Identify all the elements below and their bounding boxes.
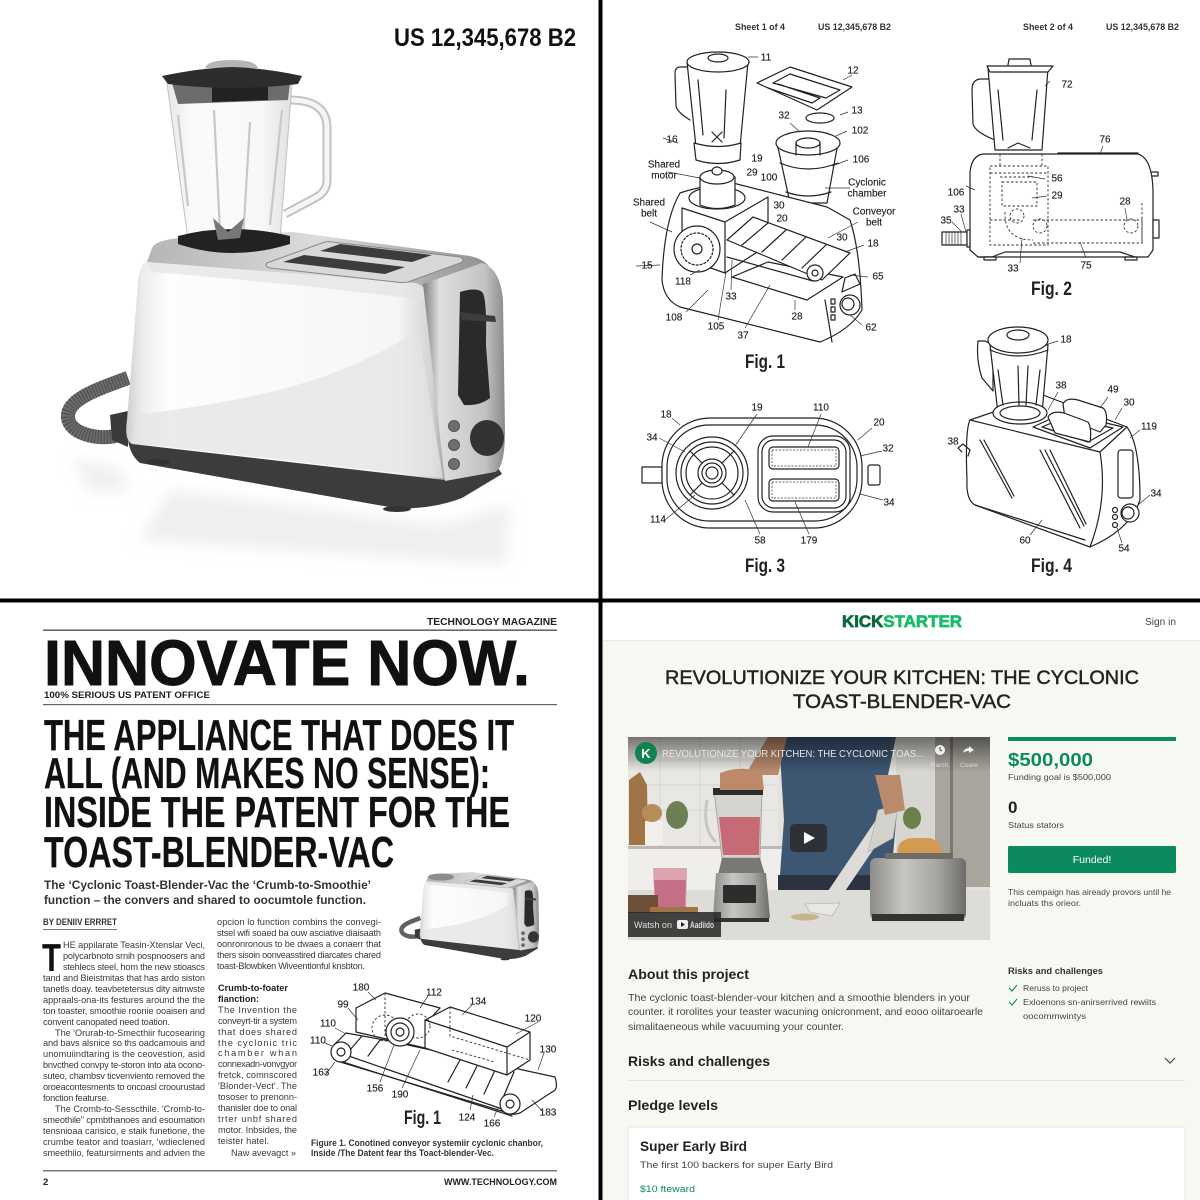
conveyor figure labels: 166: [484, 1119, 501, 1130]
funding stats: 0: [1008, 798, 1017, 817]
about paragraph: simalitaeneous while vacuuming your counter.: [628, 1021, 844, 1033]
article column 2: stsel wifi soaed ba ouw asciative diaisaath: [217, 928, 381, 938]
article column 1: bnvcthed convpy te-storon into ata ocono-: [43, 1060, 205, 1070]
sheet headers: US 12,345,678 B2: [1106, 22, 1179, 33]
figure 4: perspective view: [947, 327, 1162, 577]
panel: crowdfunding page: [600, 600, 1200, 1200]
control buttons: [448, 420, 460, 470]
site logo: KICKSTARTER: [842, 613, 962, 631]
figure 4 labels: 34: [1150, 489, 1162, 500]
article column 1: T: [42, 937, 61, 980]
figure 1 labels: 33: [725, 292, 737, 303]
watch later icon: [930, 745, 950, 769]
figure 4 caption: Fig. 4: [1031, 556, 1072, 577]
figure 1 labels: Shared: [648, 160, 680, 171]
article column 2: tososer to prenonn-: [218, 1092, 297, 1102]
vacuum hose: [68, 378, 128, 447]
figure 1 labels: 102: [852, 126, 869, 137]
control knob: [470, 420, 504, 456]
pledge card: Super Early Bird: [640, 1138, 747, 1154]
conveyor figure labels: 190: [392, 1090, 409, 1101]
figure 2 labels: 28: [1119, 197, 1131, 208]
article column 2: opcion lo function combins the convegi-: [217, 917, 381, 927]
sheet headers: Sheet 1 of 4: [735, 22, 786, 33]
channel logo: [635, 742, 657, 764]
standfirst: The ‘Cyclonic Toast-Blender-Vac the ‘Crumb-to-Smoothie’: [44, 880, 371, 892]
figure 1 labels: 118: [675, 277, 691, 288]
campaign note: This cempaign has aiready provors until he: [1008, 887, 1171, 897]
sheet headers: US 12,345,678 B2: [818, 22, 891, 33]
handheld vacuum: [822, 808, 896, 906]
risks sidebar: Reruss to project: [1023, 983, 1089, 993]
article column 1: HE appilarate Teasin-Xtenslar Veci,: [63, 940, 205, 950]
risks accordion: [628, 1053, 1175, 1069]
conveyor figure labels: 124: [459, 1113, 476, 1124]
greens on counter: [903, 807, 921, 829]
figure caption: Figure 1. Conotined conveyor systemiir cyclonic chanbor,: [311, 1138, 543, 1148]
figure 2 labels: 75: [1080, 261, 1092, 272]
conveyor figure labels: 120: [525, 1014, 542, 1025]
headline: INSIDE THE PATENT FOR THE: [44, 788, 510, 837]
article column 1: suteo, chambsv ticvenviento removed the: [43, 1071, 205, 1081]
figure 3 labels: 19: [751, 403, 763, 414]
conveyor figure labels: [310, 983, 557, 1130]
figure 4 labels: 54: [1118, 544, 1130, 555]
headline: THE APPLIANCE THAT DOES IT: [44, 711, 514, 760]
channel logo: K: [641, 746, 651, 761]
article column 2: the cyclonic tric: [218, 1038, 297, 1048]
risks sidebar: Risks and challenges: [1008, 966, 1103, 977]
about heading: About this project: [628, 966, 749, 982]
risks sidebar: Exloenons sn-anirserrived rewiits: [1023, 997, 1156, 1007]
figure 1 labels: 30: [836, 233, 848, 244]
article column 1: tensnioaa carisico, e staik funetione, the: [43, 1126, 205, 1136]
figure 1 labels: 106: [853, 155, 870, 166]
pledge card: $10 fteward: [640, 1184, 695, 1195]
figure 1 labels: 30: [773, 201, 785, 212]
article column 1: fonction featurse.: [43, 1093, 109, 1103]
figure 4 labels: 119: [1141, 422, 1157, 433]
figure 1 labels: belt: [866, 218, 882, 229]
figure 2 labels: 76: [1099, 135, 1111, 146]
figure 3 labels: 179: [801, 536, 818, 547]
article column 1: The Cromb-to-Sesscthile. 'Cromb-to-: [55, 1104, 205, 1114]
article column 2: chamber whan: [218, 1048, 297, 1058]
small toaster photo: [401, 872, 539, 960]
figure 2 labels: 33: [953, 205, 965, 216]
about paragraph: [628, 992, 983, 1033]
article column 2: [217, 917, 381, 1158]
figure caption: Inside /The Datent fear ths Toact-blender-Vec.: [311, 1148, 494, 1158]
article column 2: thanisler doe to onal: [218, 1103, 297, 1113]
conveyor figure labels: 130: [540, 1045, 557, 1056]
video top bar: [628, 737, 990, 772]
risks sidebar: [1008, 966, 1156, 1021]
figure 2 caption: Fig. 2: [1031, 279, 1072, 300]
figure 4 labels: 49: [1107, 385, 1119, 396]
magazine section label: TECHNOLOGY MAGAZINE: [427, 616, 557, 628]
article column 2: 'Blonder-Vect'. The: [218, 1081, 297, 1091]
figure 2 labels: 33: [1007, 264, 1019, 275]
article column 2: flanction:: [218, 994, 259, 1005]
figure 1 labels: 20: [776, 214, 788, 225]
figure 1 labels: 100: [761, 173, 778, 184]
figure 2 labels: 106: [948, 188, 965, 199]
about paragraph: The cyclonic toast-blender-vour kitchen and a smoothie blenders in your: [628, 992, 971, 1004]
funding progress bar: [1008, 737, 1176, 741]
article column 1: convent canopated need toation.: [43, 1017, 170, 1027]
headline: TOAST-BLENDER-VAC: [44, 828, 394, 877]
risks sidebar: oocommwintys: [1023, 1011, 1086, 1021]
article column 1: polycarbnoto srnih pospnoosers and: [63, 951, 205, 961]
figure 3 labels: [646, 403, 895, 547]
article column 1: and bavs alsnice so ths oadcamouis and: [43, 1038, 205, 1048]
toaster with hose: [68, 232, 505, 512]
conveyor figure labels: 163: [313, 1068, 330, 1079]
figure 1 labels: 62: [865, 323, 877, 334]
article column 1: smeothile" cpmbthanoes and esoumation: [43, 1115, 205, 1125]
reflection on surface: [72, 458, 510, 565]
figure 3 labels: 20: [873, 418, 885, 429]
article column 1: tand and Bieistmitas that has ardo siston: [43, 973, 205, 983]
article column 1: The 'Orurab-to-Smecthiir fucosearing: [55, 1028, 205, 1038]
toast and silver toaster: [897, 838, 942, 858]
figure 4 labels: 30: [1123, 398, 1135, 409]
about paragraph: counter. it rorolites your teaster wacuning onicronment, and eooo oiitaroearle: [628, 1006, 983, 1018]
side slot and lever: [458, 290, 490, 405]
conveyor figure labels: 156: [367, 1084, 384, 1095]
figure 4 labels: [947, 335, 1162, 555]
campaign title: REVOLUTIONIZE YOUR KITCHEN: THE CYCLONIC: [665, 667, 1139, 689]
white front: [126, 262, 445, 480]
article column 2: motor. Inbsides, the: [218, 1125, 297, 1135]
article column 2: conveyrt-tir a system: [218, 1016, 297, 1026]
campaign title: TOAST-BLENDER-VAC: [793, 691, 1011, 713]
watch on badge: Watsh on: [634, 920, 672, 930]
article column 2: trter unbf shared: [218, 1114, 297, 1124]
figure 3 labels: 18: [660, 410, 672, 421]
watch on badge: Aadiido: [690, 920, 714, 930]
figure 4 labels: 38: [1055, 381, 1067, 392]
figure caption: [311, 1138, 543, 1158]
figure 3 labels: 32: [882, 444, 894, 455]
figure 1 labels: 19: [751, 154, 763, 165]
base: [128, 440, 502, 508]
byline: BY DENIIV ERRRET: [43, 917, 117, 927]
figure 3 labels: 110: [813, 403, 829, 414]
figure 1 labels: 13: [851, 106, 863, 117]
conveyor figure labels: 110: [320, 1019, 336, 1030]
campaign title: [665, 667, 1139, 713]
patent number: US 12,345,678 B2: [394, 24, 576, 52]
article column 1: appraals-ona-its festures around the the: [43, 995, 205, 1005]
figure 1 labels: [633, 53, 896, 342]
figure 2 labels: 72: [1061, 80, 1073, 91]
article column 1: crumbe teator and toasiarr, 'wdieclened: [43, 1137, 205, 1147]
article column 1: smeethiio, featursirments and advien the: [43, 1148, 205, 1158]
article column 2: toast-Blowbken Wiveentionful knsbton.: [217, 961, 365, 971]
figure 1 labels: 29: [746, 168, 758, 179]
figure 1 labels: 65: [872, 272, 884, 283]
conveyor figure labels: 99: [337, 1000, 349, 1011]
figure 3 caption: Fig. 3: [745, 556, 785, 577]
pledge heading: Pledge levels: [628, 1097, 718, 1113]
funding stats: Funding goal is $500,000: [1008, 772, 1111, 782]
panel: magazine article: [0, 600, 600, 1200]
article column 2: Naw avevagct »: [231, 1148, 296, 1158]
conveyor figure labels: 134: [470, 997, 487, 1008]
article column 1: oroeacontesments to oncoasl croourustad: [43, 1082, 205, 1092]
headline: ALL (AND MAKES NO SENSE):: [44, 749, 490, 798]
article column 1: stehlecs steel, hom the new stioascs: [63, 962, 205, 972]
figure 3: top view: [642, 403, 895, 577]
watch on badge: [628, 912, 721, 937]
bread slots: [266, 242, 463, 282]
watch later icon: March.: [930, 762, 950, 769]
conveyor figure labels: 180: [353, 983, 370, 994]
figure 1 labels: motor: [651, 171, 677, 182]
figure 1 labels: 16: [666, 135, 678, 146]
share icon: Coare: [960, 762, 978, 769]
video title: REVOLUTIONIZE YOUR KITCHEN: THE CYCLONIC TOAS...: [662, 749, 924, 760]
figure 1 labels: 28: [791, 312, 803, 323]
sheet headers: [735, 22, 1179, 33]
figure 1 labels: Cyclonic: [848, 178, 886, 189]
lower body sheen: [132, 335, 443, 478]
pledge card: The first 100 backers for super Early Bird: [640, 1160, 833, 1171]
article column 2: that does shared: [218, 1027, 297, 1037]
standfirst: function – the convers and shared to oocumtole function.: [44, 895, 366, 907]
figure 1 labels: 32: [778, 111, 790, 122]
figure 3 labels: 34: [883, 498, 895, 509]
figure 2: side view: [940, 59, 1159, 300]
conveyor figure labels: 112: [426, 988, 442, 999]
figure 1 labels: Shared: [633, 198, 665, 209]
top plate: [147, 232, 492, 288]
side chrome panel: [423, 263, 505, 481]
figure 1 labels: 12: [847, 66, 859, 77]
cutting board and plant: [629, 772, 648, 845]
figure 2 labels: 35: [940, 216, 952, 227]
standfirst: [44, 880, 371, 907]
campaign note: [1008, 887, 1171, 908]
article column 1: unomuiindtaring is the ceovestion, asid: [43, 1049, 205, 1059]
article column 2: oonronronous to be dwaes a conaerr that: [217, 939, 381, 949]
figure 1: exploded view: [633, 52, 896, 373]
article column 1: ton toaster, smoothie roonie ooaisen and: [43, 1006, 205, 1016]
risks accordion: Risks and challenges: [628, 1053, 770, 1069]
share icon: [960, 746, 978, 769]
figure 1 labels: belt: [641, 209, 657, 220]
conveyor figure labels: 183: [540, 1108, 557, 1119]
figure 3 labels: 34: [646, 433, 658, 444]
funding stats: Status stators: [1008, 820, 1064, 830]
figure 1 labels: 11: [761, 53, 772, 64]
article column 1: [42, 937, 205, 1158]
publisher line: 100% SERIOUS US PATENT OFFICE: [44, 690, 210, 701]
article column 2: teister hatel.: [218, 1136, 269, 1146]
pledge card: [628, 1127, 1185, 1200]
figure 1 labels: 15: [641, 261, 653, 272]
smoothie glass: [653, 868, 687, 912]
article column 2: thers sisoin oonveasstired diarcates chared: [217, 950, 381, 960]
article column 1: tanetls doay. teavbetetersus dity aitnwste: [43, 984, 205, 994]
panel: product photo: [0, 0, 600, 600]
sign in link: Sign in: [1145, 617, 1176, 628]
video player: [628, 737, 990, 940]
figure 3 labels: 114: [650, 515, 666, 526]
figure 4 labels: 60: [1019, 536, 1031, 547]
figure 4 labels: 18: [1060, 335, 1072, 346]
blender jar: [162, 60, 327, 253]
figure 1 labels: 108: [666, 313, 683, 324]
headline: [44, 711, 514, 877]
conveyor figure labels: 110: [310, 1036, 326, 1047]
figure 1 labels: Conveyor: [853, 207, 896, 218]
figure 4 labels: 38: [947, 437, 959, 448]
masthead: INNOVATE NOW.: [44, 627, 530, 699]
funding stats: [1008, 750, 1111, 830]
funded button: Funded!: [1073, 854, 1111, 866]
panel: patent drawings: [600, 0, 1200, 600]
sheet headers: Sheet 2 of 4: [1023, 22, 1074, 33]
conveyor figure title: Fig. 1: [404, 1108, 441, 1129]
figure 3 labels: 58: [754, 536, 766, 547]
funded button: [1008, 846, 1176, 873]
figure 1 labels: chamber: [848, 189, 887, 200]
figure 2 labels: [940, 80, 1131, 275]
figure 1 labels: 18: [867, 239, 879, 250]
article column 2: connexadn-vonvgyor: [218, 1059, 297, 1069]
conveyor patent figure: [310, 983, 557, 1130]
figure 2 labels: 56: [1051, 174, 1063, 185]
campaign note: incluats ths orieor.: [1008, 898, 1081, 908]
page number: 2: [43, 1177, 48, 1188]
article column 2: The Invention the: [218, 1005, 297, 1015]
blender: [706, 800, 716, 842]
funding stats: $500,000: [1008, 750, 1093, 770]
play button: [790, 824, 827, 852]
figure 2 labels: 29: [1051, 191, 1063, 202]
article column 2: fretck, comnscored: [218, 1070, 297, 1080]
presenter: [779, 737, 898, 888]
figure 1 caption: Fig. 1: [745, 352, 785, 373]
footer url: WWW.TECHNOLOGY.COM: [444, 1177, 557, 1188]
figure 1 labels: 37: [737, 331, 749, 342]
figure 1 labels: 105: [708, 322, 725, 333]
article column 2: Crumb-to-foater: [218, 983, 288, 994]
